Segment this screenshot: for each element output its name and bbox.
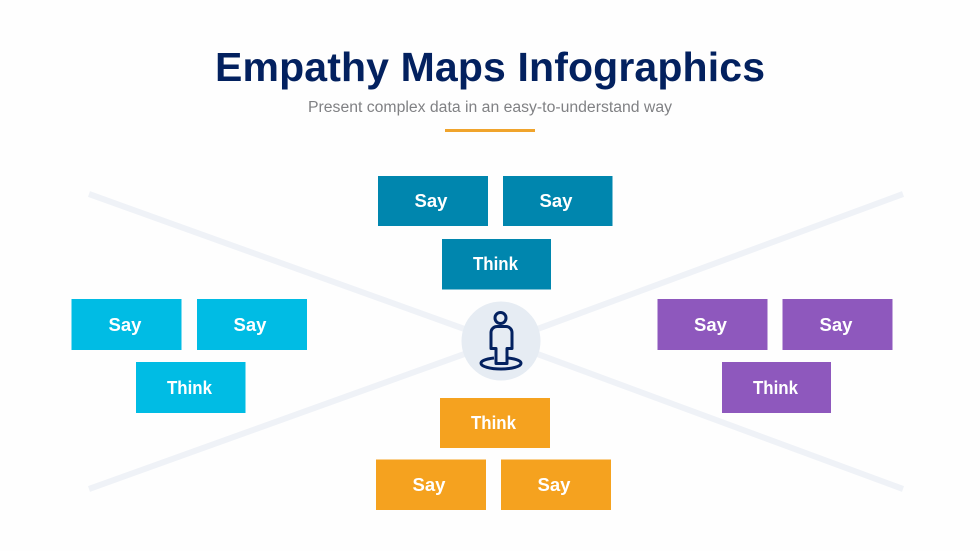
think box: Think bbox=[471, 412, 517, 433]
say box: Say bbox=[820, 314, 853, 335]
think box: Think bbox=[473, 253, 519, 274]
say box bbox=[658, 299, 768, 350]
say box bbox=[782, 299, 892, 350]
think box bbox=[442, 239, 551, 290]
title: Empathy Maps Infographics bbox=[215, 44, 765, 90]
say box: Say bbox=[538, 474, 571, 495]
think box bbox=[136, 362, 246, 413]
panel: top group bbox=[378, 176, 612, 290]
say box bbox=[503, 176, 612, 226]
say box: Say bbox=[415, 190, 448, 211]
connector lines bbox=[89, 194, 903, 489]
title underline bbox=[445, 129, 535, 132]
panel: left group bbox=[72, 299, 307, 413]
subtitle: Present complex data in an easy-to-understand way bbox=[308, 99, 672, 116]
say box bbox=[376, 460, 486, 510]
say box: Say bbox=[694, 314, 728, 335]
icon: person on location ring bbox=[462, 302, 540, 380]
say box: Say bbox=[540, 190, 573, 211]
say box: Say bbox=[109, 314, 142, 335]
panel: right group bbox=[658, 299, 892, 413]
say box bbox=[197, 299, 307, 350]
say box bbox=[72, 299, 182, 350]
think box: Think bbox=[167, 377, 213, 398]
think box bbox=[440, 398, 550, 448]
say box bbox=[378, 176, 488, 226]
panel: bottom group bbox=[376, 398, 611, 510]
say box: Say bbox=[234, 314, 267, 335]
think box bbox=[722, 362, 831, 413]
think box: Think bbox=[753, 377, 799, 398]
say box: Say bbox=[413, 474, 446, 495]
say box bbox=[501, 460, 611, 510]
